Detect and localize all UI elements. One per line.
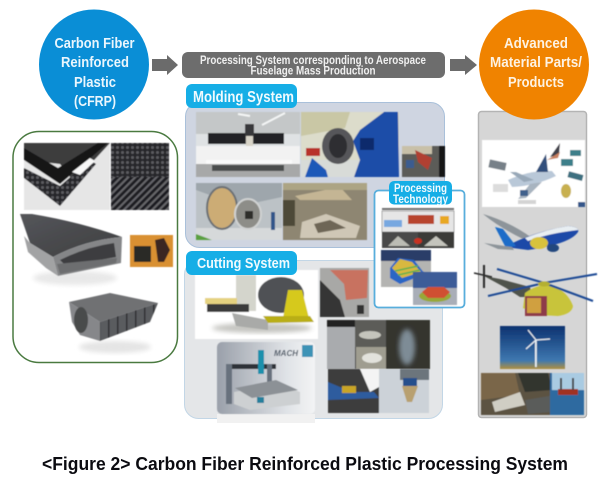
image: autoclave — [196, 183, 282, 240]
image: vehicles and offshore collage — [481, 373, 584, 415]
image: machining collage — [327, 320, 430, 369]
label: processing technology: Technology — [393, 192, 448, 206]
circle: advanced material parts: Advanced — [504, 35, 568, 52]
label: molding system: Molding System — [193, 89, 294, 106]
image: Mach 4 waterjet: MACH — [274, 349, 298, 358]
image: fuselage trimming machine — [195, 270, 318, 339]
image: process chart — [382, 208, 454, 248]
banner: processing system: Fuselage Mass Production — [250, 66, 376, 78]
image: passenger airplane — [483, 214, 578, 252]
label: processing technology: Processing — [394, 181, 447, 195]
label: cutting system: Cutting System — [197, 255, 290, 272]
image: gantry machine — [196, 112, 300, 177]
panel: products — [474, 112, 597, 418]
circle: advanced material parts: Products — [508, 74, 564, 91]
panel: processing technology — [374, 190, 464, 308]
image: helicopter — [474, 265, 597, 316]
image: carbon fuselage box — [69, 293, 158, 353]
banner: processing system: Processing System corresponding to Aerospace — [200, 55, 426, 67]
image: waterjet tool collage — [328, 369, 429, 413]
image: carbon weave close-up — [111, 143, 169, 210]
image: cutting head — [320, 268, 369, 317]
label: processing technology — [389, 181, 452, 206]
image: robot arm photo — [402, 146, 445, 177]
circle: CFRP: Carbon Fiber — [54, 35, 135, 52]
reflection: waterjet — [217, 414, 315, 423]
image: blue filament winding robot — [301, 112, 399, 177]
circle: CFRP: Reinforced — [61, 54, 129, 71]
circle: advanced material parts: Material Parts/ — [490, 54, 583, 71]
image: carbon wing section — [20, 214, 122, 285]
panel: CFRP samples — [13, 132, 178, 362]
image: mold workshop — [283, 183, 367, 240]
image: 3D composite layup — [381, 250, 431, 287]
panel: cutting system — [184, 260, 442, 423]
label: cutting system — [186, 251, 297, 275]
arrow: CFRP to processing — [152, 55, 178, 75]
circle: CFRP — [39, 10, 149, 120]
image: small carbon parts — [130, 235, 173, 267]
label: molding system — [186, 84, 297, 108]
image: carbon laminate sheet — [24, 143, 110, 210]
circle: CFRP: Plastic — [74, 74, 116, 91]
circle: CFRP: (CFRP) — [74, 93, 116, 110]
panel: molding system — [186, 102, 445, 248]
circle: advanced material parts — [479, 10, 589, 120]
image: wind turbine — [500, 326, 565, 369]
image: simulation render — [413, 272, 457, 305]
image: aircraft parts diagram — [482, 140, 585, 207]
image: Mach 4 waterjet — [217, 342, 315, 414]
title: <Figure 2> Carbon Fiber Reinforced Plastic Processing System — [42, 454, 568, 474]
arrow: processing to products — [450, 55, 477, 75]
banner: processing system — [182, 52, 445, 78]
